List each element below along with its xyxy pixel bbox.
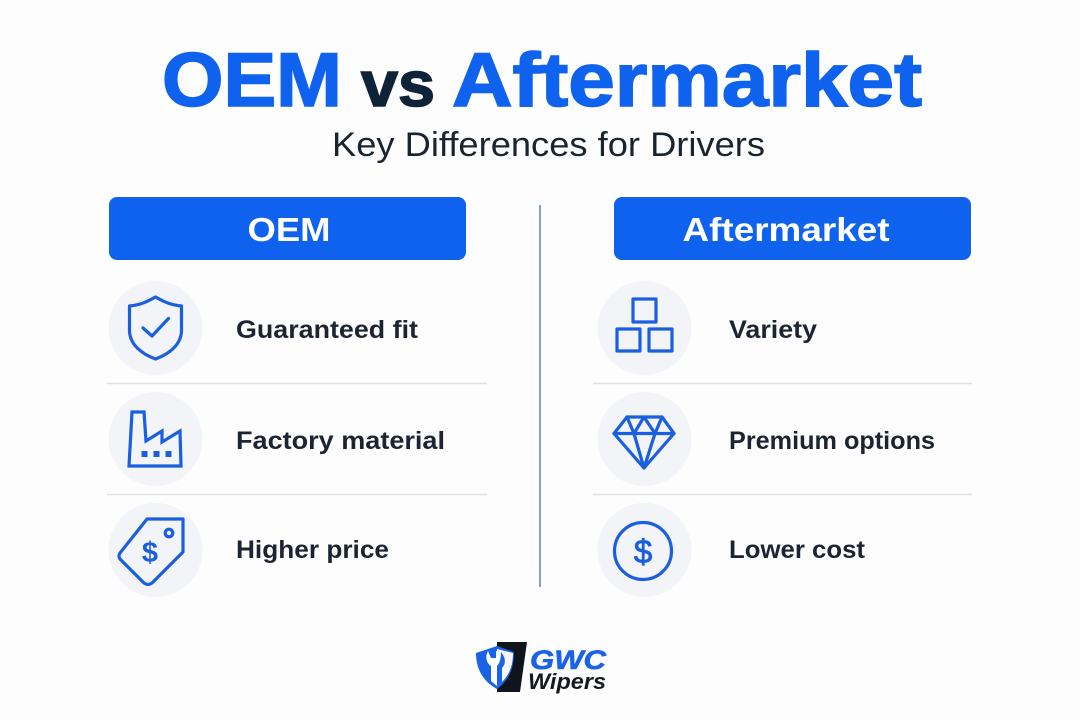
- title: vs: [361, 48, 435, 120]
- label: Lower cost: Lower cost: [729, 536, 866, 564]
- icon: dollar coin: [598, 503, 692, 597]
- icon: logo shield: [476, 642, 527, 692]
- panel: OEM header: [109, 197, 466, 260]
- label: Higher price: Higher price: [236, 536, 389, 564]
- icon: shield with check: [108, 281, 202, 375]
- panel: Aftermarket header: Aftermarket: [682, 211, 890, 248]
- logo: GWC Wipers: Wipers: [528, 669, 606, 694]
- logo: GWC Wipers: [476, 642, 607, 694]
- title: Aftermarket: [452, 38, 922, 123]
- title: OEM: [162, 38, 342, 123]
- panel: Aftermarket header: [614, 197, 971, 260]
- logo: GWC Wipers: GWC: [530, 645, 607, 675]
- label: Variety: Variety: [729, 316, 817, 344]
- icon: diamond: [598, 392, 692, 486]
- title: [162, 38, 922, 123]
- label: Guaranteed fit: Guaranteed fit: [236, 316, 419, 344]
- center divider: [539, 205, 541, 587]
- label: Premium options: Premium options: [729, 427, 935, 455]
- icon: price tag: $: [142, 537, 158, 569]
- icon: factory: [108, 392, 202, 486]
- panel: OEM header: OEM: [248, 211, 330, 248]
- label: Factory material: Factory material: [236, 427, 445, 455]
- icon: dollar coin: $: [634, 533, 652, 570]
- icon: price tag: [108, 503, 202, 597]
- icon: blocks: [598, 281, 692, 375]
- subtitle: Key Differences for Drivers: [332, 126, 765, 164]
